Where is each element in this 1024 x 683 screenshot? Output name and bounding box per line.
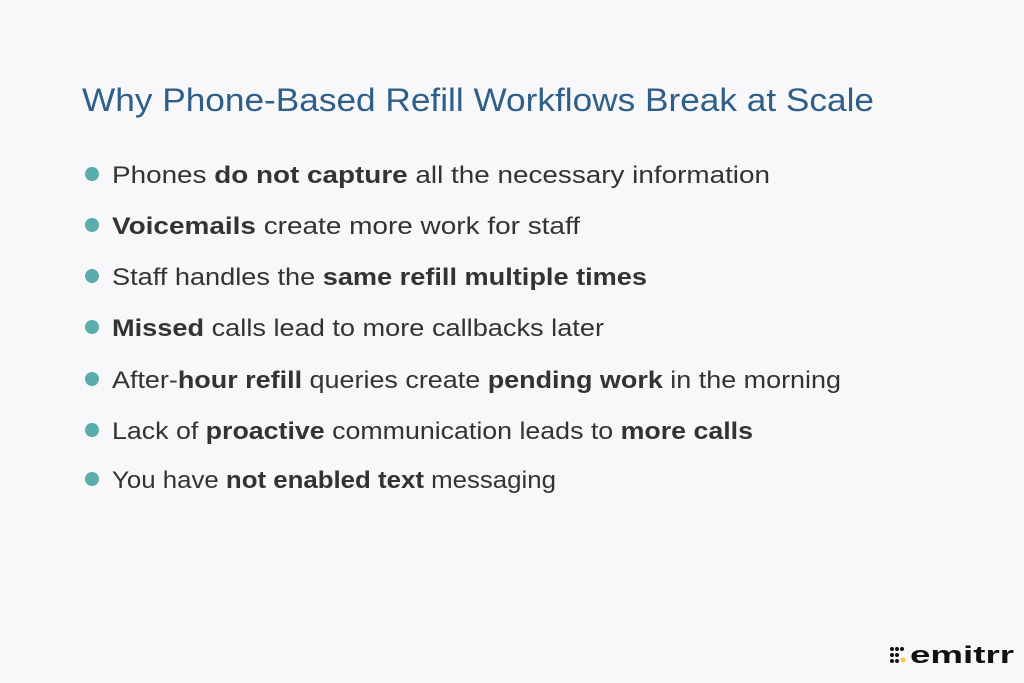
bullet 6: Lack of proactive communication leads to more calls — [112, 418, 753, 445]
bullet 3: Staff handles the same refill multiple times — [112, 264, 647, 291]
bullet 2: Voicemails create more work for staff — [112, 213, 580, 240]
bullet list — [85, 162, 841, 494]
title: Why Phone-Based Refill Workflows Break at Scale — [82, 82, 874, 118]
logo: emitrr — [890, 642, 1014, 669]
bullet 5: After- hour refill queries create pending work in the morning — [112, 367, 841, 394]
icon: dot grid — [890, 647, 906, 663]
bullet 1: Phones do not capture all the necessary information — [112, 162, 770, 189]
logo: emitrr: emitrr — [910, 642, 1014, 669]
bullet 7: You have not enabled text messaging — [112, 467, 556, 494]
bullet 4: Missed calls lead to more callbacks later — [112, 315, 604, 342]
